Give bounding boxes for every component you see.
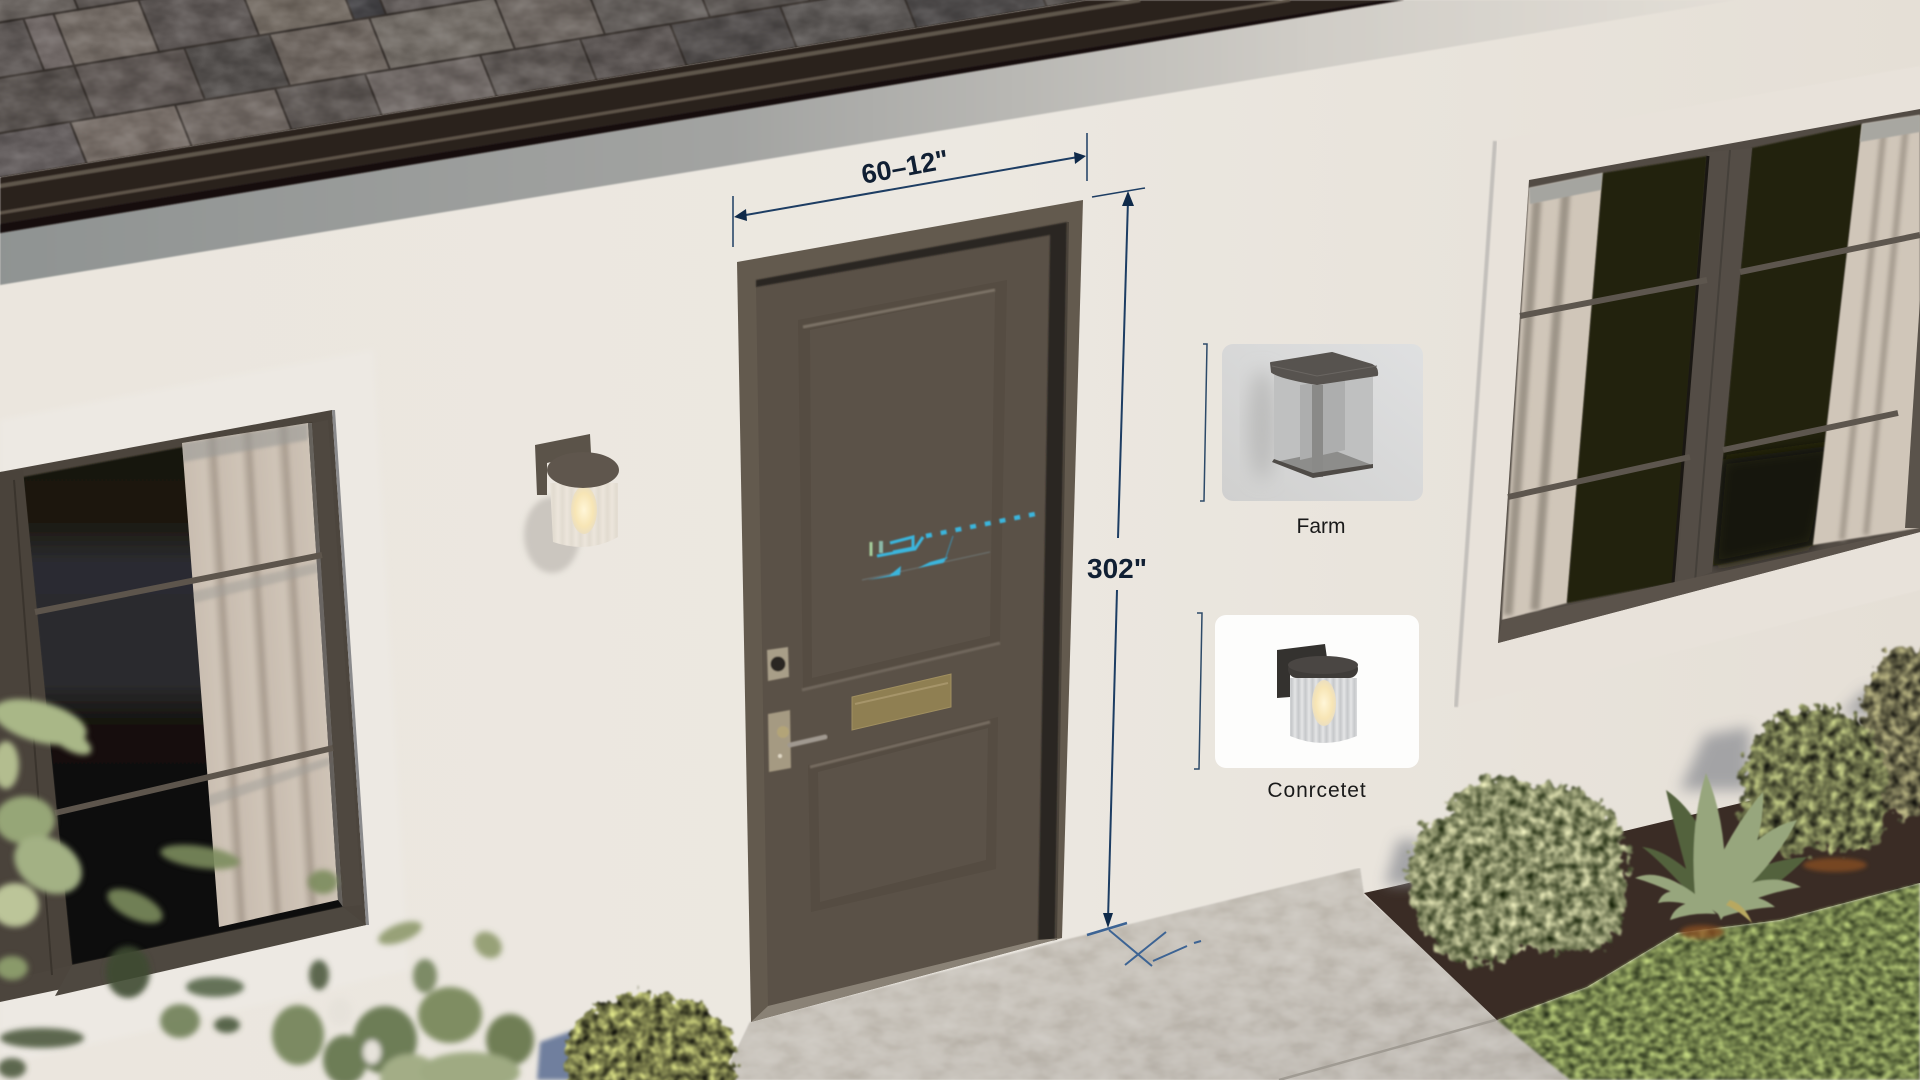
garden bed mulch (1364, 760, 1920, 1020)
left window curtain (182, 423, 338, 927)
Farm label: Farm (1296, 515, 1346, 538)
walkway (722, 868, 1570, 1080)
wall sconce with shadow (524, 434, 619, 573)
width dimension line (733, 133, 1087, 247)
height dimension line (1087, 188, 1201, 966)
lawn (1497, 883, 1920, 1080)
bark patches (1680, 858, 1867, 939)
height label: 302" (1087, 553, 1147, 584)
Farm height bracket (1200, 344, 1207, 501)
shadow behind round shrub (537, 1030, 575, 1080)
plant shadows on wall (1385, 690, 1890, 885)
door shadow reveal (756, 222, 1067, 940)
eave shadow on wall (0, 0, 1737, 285)
large shrub (1408, 777, 1627, 965)
door (737, 200, 1083, 1022)
width label: 60–12" (859, 144, 951, 190)
left window (0, 410, 393, 1002)
Concrete sconce (1277, 644, 1358, 743)
right window surround (1456, 66, 1920, 707)
left window surround (0, 350, 408, 1065)
lower door panel (808, 717, 998, 912)
deadbolt (767, 647, 789, 681)
brass mail slot (852, 674, 951, 730)
Farm lantern (1248, 353, 1377, 480)
left window muntins (35, 555, 333, 813)
right window right curtain (1813, 115, 1920, 545)
right window glass panes (1567, 156, 1707, 603)
right window left curtain (1502, 173, 1603, 620)
door handle (768, 710, 825, 772)
shrub middle right (1740, 707, 1887, 855)
option card: Concrete (1194, 613, 1419, 802)
roof (0, 0, 1404, 233)
Concrete label: Conrcetet (1267, 779, 1367, 802)
option card: Farm (1200, 344, 1423, 538)
ground tick marks (1087, 923, 1201, 966)
right window muntins (1508, 235, 1920, 497)
gutter and fascia (0, 0, 1404, 233)
right window mullion (1677, 148, 1752, 585)
agave plant (1635, 773, 1807, 923)
shrub far right (1860, 647, 1920, 817)
glitched blue marking on door (862, 513, 1040, 580)
round shrub by door (566, 994, 734, 1080)
upper door panel (798, 280, 1007, 690)
door trim (737, 200, 1083, 1022)
blurred foreground foliage (0, 690, 534, 1080)
right window (1498, 109, 1920, 643)
Concrete height bracket (1194, 613, 1202, 769)
door leaf (756, 235, 1050, 1006)
